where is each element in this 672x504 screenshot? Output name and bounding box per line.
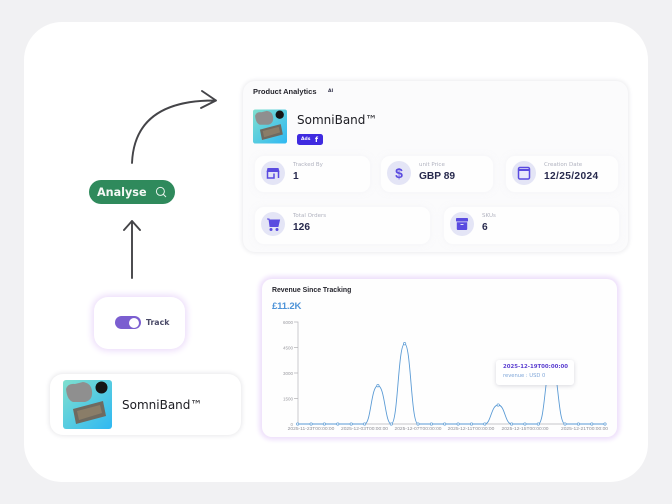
stat: creation date: 12/25/2024 xyxy=(544,171,598,182)
stat: creation date: Creation Date xyxy=(544,162,582,168)
ads badge xyxy=(297,134,323,145)
y axis labels xyxy=(283,320,293,427)
stat: total orders: Total Orders xyxy=(293,213,326,219)
y axis labels: 6000 xyxy=(283,320,293,325)
product image xyxy=(63,380,112,429)
ads badge: f xyxy=(315,136,318,144)
icon: store xyxy=(261,161,285,185)
stat: tracked by xyxy=(255,156,370,192)
icon: dollar: $ xyxy=(395,165,403,181)
x axis labels: 2025-12-15T00:00:00 xyxy=(501,426,549,432)
stat: tracked by: Tracked By xyxy=(293,162,323,168)
stat: unit price xyxy=(381,156,493,192)
total revenue value: £11.2K xyxy=(272,300,301,312)
heading: Product Analytics xyxy=(253,86,316,96)
product image xyxy=(253,110,287,144)
tooltip date: 2025-12-19T00:00:00 xyxy=(503,364,568,370)
x axis labels: 2025-12-07T00:00:00 xyxy=(394,426,442,432)
y axis labels: 1500 xyxy=(283,396,293,402)
product name: SomniBand™ xyxy=(297,113,377,127)
track toggle card xyxy=(94,297,185,349)
tooltip value: revenue : USD 0 xyxy=(503,372,545,378)
curved arrow: analyse to product analytics xyxy=(131,90,217,164)
ads badge: Ads xyxy=(301,136,310,142)
x axis labels: 2025-11-23T00:00:00 xyxy=(288,426,335,432)
button: Analyse: Analyse xyxy=(97,186,147,198)
product card: SomniBand xyxy=(50,374,241,435)
x axis labels: 2025-12-21T00:00:00 xyxy=(561,426,608,432)
data points xyxy=(296,342,606,425)
stat: total orders xyxy=(255,207,430,244)
track label: Track xyxy=(146,318,169,326)
toggle switch xyxy=(115,316,141,329)
revenue line xyxy=(298,344,605,424)
button: Analyse xyxy=(89,180,175,204)
icon: dollar xyxy=(387,161,411,185)
AI tag: AI xyxy=(328,89,333,94)
icon: archive box xyxy=(450,212,474,236)
panel: revenue since tracking xyxy=(262,279,617,437)
y axis labels: 3000 xyxy=(283,371,293,376)
stat: SKUs xyxy=(444,207,619,244)
heading: Revenue Since Tracking xyxy=(272,286,351,294)
x axis labels: 2025-12-03T00:00:00 xyxy=(341,426,388,432)
straight arrow: track to analyse xyxy=(123,220,141,279)
chart tooltip xyxy=(496,360,574,385)
panel: product analytics xyxy=(243,81,628,252)
stat: SKUs: 6 xyxy=(482,222,488,233)
stat: SKUs: SKUs xyxy=(482,213,496,219)
stat: unit price: GBP 89 xyxy=(419,171,455,182)
stat: tracked by: 1 xyxy=(293,171,299,182)
stat: total orders: 126 xyxy=(293,222,310,233)
x axis labels: 2025-12-11T00:00:00 xyxy=(448,426,495,432)
stat: creation date xyxy=(506,156,618,192)
y axis labels: 4500 xyxy=(283,346,293,350)
y axis labels: 0 xyxy=(290,422,293,427)
axes xyxy=(294,322,605,424)
icon: calendar xyxy=(512,161,536,185)
stat: unit price: unit Price xyxy=(419,162,445,168)
x axis labels xyxy=(288,426,608,432)
product name: SomniBand™ xyxy=(122,398,202,412)
icon: cart xyxy=(261,212,285,236)
